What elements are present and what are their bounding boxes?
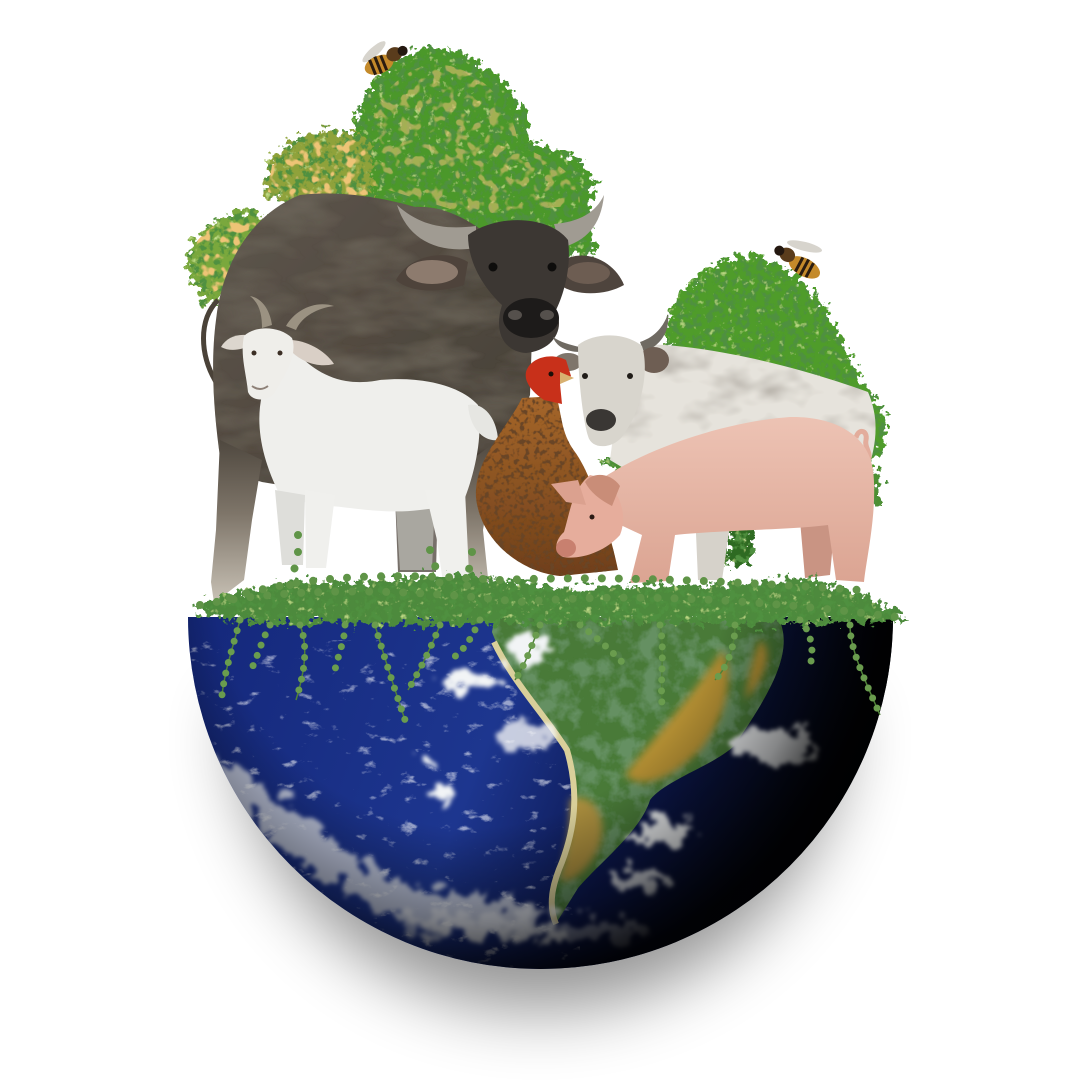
globe drop shadow	[235, 705, 845, 1010]
goat tail	[468, 405, 498, 440]
animal: pig	[551, 417, 874, 583]
chicken comb and head	[526, 356, 571, 404]
buffalo head	[468, 220, 569, 353]
goat ears	[221, 335, 250, 350]
goat far legs	[395, 495, 435, 570]
pig eye	[590, 514, 594, 520]
buffalo tail	[204, 300, 218, 382]
illustration: livestock standing on a half globe	[183, 41, 909, 1054]
hanging vine stems	[222, 620, 880, 720]
cow muzzle	[586, 409, 616, 431]
continent: South America	[492, 617, 784, 925]
half globe	[180, 610, 900, 975]
pig tail	[856, 431, 869, 462]
icon: bee top right	[769, 227, 832, 283]
foliage: orange blossoms, upper cluster	[268, 136, 368, 200]
clouds	[215, 636, 819, 939]
animal: goat	[221, 296, 498, 597]
highland patches	[625, 650, 729, 782]
buffalo hind leg	[211, 440, 262, 603]
buffalo far hind leg	[395, 495, 438, 572]
goat neck and body	[259, 351, 480, 511]
cow ears	[639, 347, 669, 373]
Andes ridge	[494, 642, 574, 924]
buffalo eyes	[488, 262, 498, 272]
buffalo right horn	[554, 195, 604, 248]
back tree: main green and orange tree	[188, 47, 594, 305]
pig far hind leg	[800, 520, 835, 578]
animal: cow	[553, 314, 876, 580]
buffalo left horn	[397, 205, 476, 249]
globe limb shading	[180, 610, 900, 975]
vine mass	[190, 575, 910, 626]
foliage: green crown	[188, 47, 594, 305]
cow horns	[553, 337, 580, 352]
cow leg	[695, 505, 733, 580]
back tree: right green tree	[600, 254, 886, 565]
foliage: orange blossoms, crown	[372, 64, 580, 215]
goat front legs	[275, 490, 305, 565]
buffalo body	[213, 193, 532, 505]
goat head	[243, 328, 294, 400]
buffalo left ear	[396, 255, 468, 290]
goat horns	[250, 296, 272, 328]
pig body	[600, 417, 874, 583]
cow head	[578, 335, 645, 446]
chicken beak	[560, 372, 574, 384]
pig head	[556, 475, 623, 558]
animal: buffalo	[204, 193, 624, 603]
foliage: orange blossoms, left cluster	[194, 216, 258, 295]
cow body	[610, 344, 876, 490]
buffalo right ear	[560, 256, 624, 293]
chicken body	[476, 396, 618, 576]
pig snout	[556, 539, 576, 557]
goat face details	[252, 350, 256, 356]
upright shoots and bright leaves	[200, 535, 905, 618]
globe ocean	[180, 610, 900, 975]
vines: leafy band across the globe's top edge	[190, 535, 910, 720]
chicken eye	[548, 372, 554, 376]
cow eyes	[582, 373, 588, 379]
icon: bee top left	[356, 31, 412, 79]
hanging vine leaves	[222, 620, 880, 720]
ocean cloud speckle	[180, 640, 580, 975]
buffalo front leg	[458, 440, 498, 599]
pig ears	[551, 480, 586, 505]
goat hind leg	[425, 490, 470, 597]
buffalo muzzle	[503, 298, 559, 338]
animal: chicken	[476, 356, 618, 576]
